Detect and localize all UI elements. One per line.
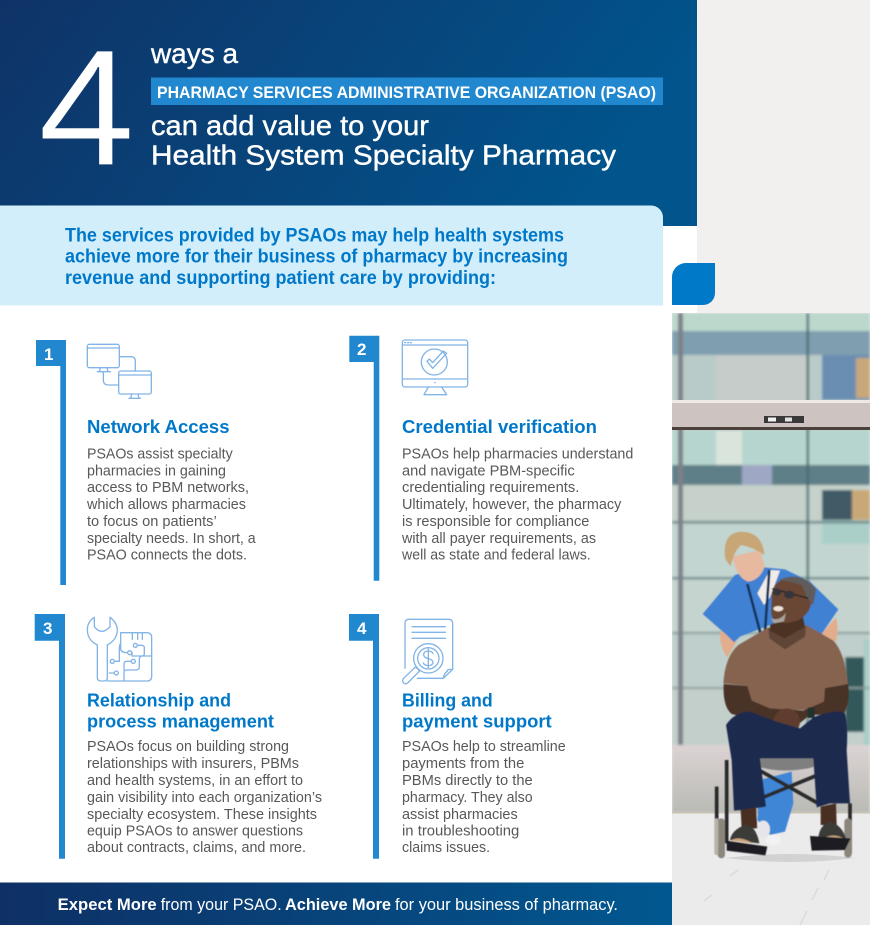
body text: PSAOs help pharmacies understand <box>402 446 633 462</box>
heading: can add value: Health System Specialty Pharmacy <box>151 140 616 170</box>
body text: and navigate PBM-specific <box>402 462 575 480</box>
panel: item 2 credential verification <box>349 336 633 581</box>
panel: item 1 network access <box>36 340 256 585</box>
body text: which allows pharmacies <box>86 496 246 513</box>
heading: can add value <box>151 110 616 170</box>
heading: process management <box>87 711 274 732</box>
footer banner: from your PSAO. <box>161 896 282 914</box>
body text: payments from the <box>402 755 524 772</box>
number marker 1 <box>36 340 66 585</box>
photo: floor <box>672 812 870 925</box>
heading: Network Access <box>87 416 230 437</box>
heading highlight: PSAO name <box>151 78 663 105</box>
photo background: blurred glass building <box>672 313 870 813</box>
body text <box>87 738 322 856</box>
body text: credentialing requirements. <box>402 479 579 496</box>
heading: ways a: ways a <box>150 38 238 69</box>
heading: Relationship and <box>87 690 231 711</box>
body text: equip PSAOs to answer questions <box>87 822 303 840</box>
patient trousers <box>726 712 850 811</box>
footer banner: Achieve More <box>285 896 391 914</box>
nurse <box>703 532 838 657</box>
body text: in troubleshooting <box>402 822 519 840</box>
decorative blue square <box>672 263 715 305</box>
body text: PBMs directly to the <box>402 772 533 789</box>
heading: payment support <box>402 711 552 732</box>
body text: to focus on patients’ <box>87 513 217 530</box>
body text: claims issues. <box>402 839 490 856</box>
body text: gain visibility into each organization’s <box>87 789 322 806</box>
photo: figures <box>703 532 852 858</box>
footer banner: Expect More <box>58 896 157 914</box>
big number 4: 4 <box>38 16 135 201</box>
panel: intro statement <box>0 206 663 306</box>
body text: PSAOs assist specialty <box>87 446 233 462</box>
number marker 2 <box>349 336 379 581</box>
number marker 3 <box>35 614 65 859</box>
heading highlight: PSAO name: PHARMACY SERVICES ADMINISTRATIVE ORGANIZATION (PSAO) <box>157 84 656 102</box>
panel: intro statement: revenue and supporting patient care by providing: <box>65 268 496 289</box>
icon: connected monitors <box>87 344 151 398</box>
heading <box>402 690 552 732</box>
panel: header background <box>0 0 697 226</box>
photo: overhead beam and sign <box>672 400 870 430</box>
number marker 4: 4 <box>357 619 367 638</box>
body text: specialty needs. In short, a <box>87 530 256 547</box>
patient torso <box>723 610 848 710</box>
patient ankles and shoes <box>727 803 851 855</box>
body text: relationships with insurers, PBMs <box>87 755 299 772</box>
body text: pharmacies in gaining <box>87 462 226 480</box>
body text: PSAO connects the dots. <box>87 546 247 564</box>
patient arms and hands <box>724 684 849 735</box>
number marker 1: 1 <box>44 345 53 364</box>
body text <box>401 446 633 564</box>
body text <box>402 738 566 856</box>
panel: intro statement: The services provided by PSAOs may help health systems <box>65 225 564 246</box>
body text: access to PBM networks, <box>87 479 249 496</box>
photo: nurse pushing patient in wheelchair <box>672 313 870 925</box>
icon: monitor with checkmark <box>402 340 468 395</box>
body text: well as state and federal laws. <box>401 546 591 564</box>
heading: Billing and <box>402 690 493 711</box>
panel: item 3 relationship and process management <box>35 614 322 859</box>
footer banner <box>0 882 672 925</box>
panel: beige top-right background <box>697 0 870 313</box>
number marker 3: 3 <box>43 619 52 638</box>
number marker 2: 2 <box>357 340 366 359</box>
body text: PSAOs focus on building strong <box>87 738 289 755</box>
patient head <box>771 577 816 623</box>
body text <box>86 446 256 564</box>
wheelchair frame <box>714 757 852 858</box>
number marker 4 <box>349 614 379 859</box>
body text: pharmacy. They also <box>402 789 533 806</box>
icon: wrench and circuit <box>87 617 152 681</box>
icon: document and magnifier with dollar <box>403 619 453 684</box>
body text: is responsible for compliance <box>402 513 589 530</box>
heading: can add value: can add value to your <box>151 110 429 141</box>
body text: Ultimately, however, the pharmacy <box>402 496 622 513</box>
footer banner: for your business of pharmacy. <box>395 896 618 914</box>
heading: Credential verification <box>402 416 597 437</box>
panel: intro statement: achieve more for their business of pharmacy by increasing <box>65 247 568 268</box>
body text: with all payer requirements, as <box>401 530 596 547</box>
nurse scrub trousers and shoes <box>757 772 793 845</box>
body text: and health systems, in an effort to <box>87 772 303 789</box>
panel: item 4 billing and payment support <box>349 614 566 859</box>
body text: about contracts, claims, and more. <box>87 839 306 856</box>
body text: assist pharmacies <box>402 806 518 823</box>
heading <box>87 690 274 732</box>
body text: PSAOs help to streamline <box>402 738 566 755</box>
body text: specialty ecosystem. These insights <box>87 806 317 823</box>
